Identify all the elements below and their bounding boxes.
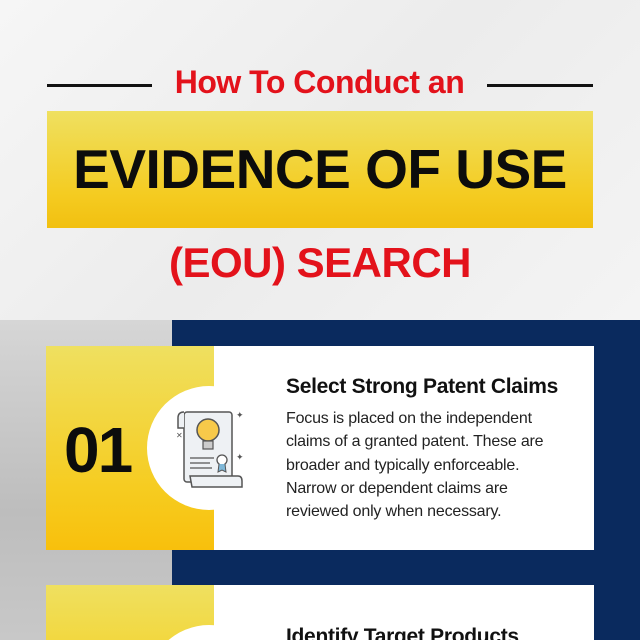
left gray strip xyxy=(0,320,172,640)
icon: patent scroll with lightbulb xyxy=(176,410,244,488)
title line right xyxy=(487,84,593,87)
card 2 xyxy=(46,585,594,640)
icon: patent scroll with lightbulb: ✦ xyxy=(236,410,244,420)
header background xyxy=(0,0,640,320)
subtitle: (EOU) SEARCH xyxy=(169,239,471,286)
yellow number block xyxy=(46,346,214,550)
card 1 title: Select Strong Patent Claims xyxy=(286,375,558,398)
number 01: 01 xyxy=(64,414,131,486)
title: how to conduct: How To Conduct an xyxy=(175,64,464,100)
white circle 2 xyxy=(147,625,271,640)
card 1 xyxy=(46,346,594,550)
title banner xyxy=(47,111,593,228)
navy panel xyxy=(172,320,640,640)
card 1 body: Focus is placed on the independent claims of a granted patent. These are broader and typically enforceable. Narrow or dependent claims are reviewed only when necessary. xyxy=(286,410,543,520)
yellow block 2 xyxy=(46,585,214,640)
white circle xyxy=(147,386,271,510)
icon: patent scroll with lightbulb: ✕ xyxy=(176,431,183,440)
banner text: EVIDENCE OF USE xyxy=(73,138,567,200)
icon: patent scroll with lightbulb: ✦ xyxy=(236,452,244,462)
title line left xyxy=(47,84,152,87)
